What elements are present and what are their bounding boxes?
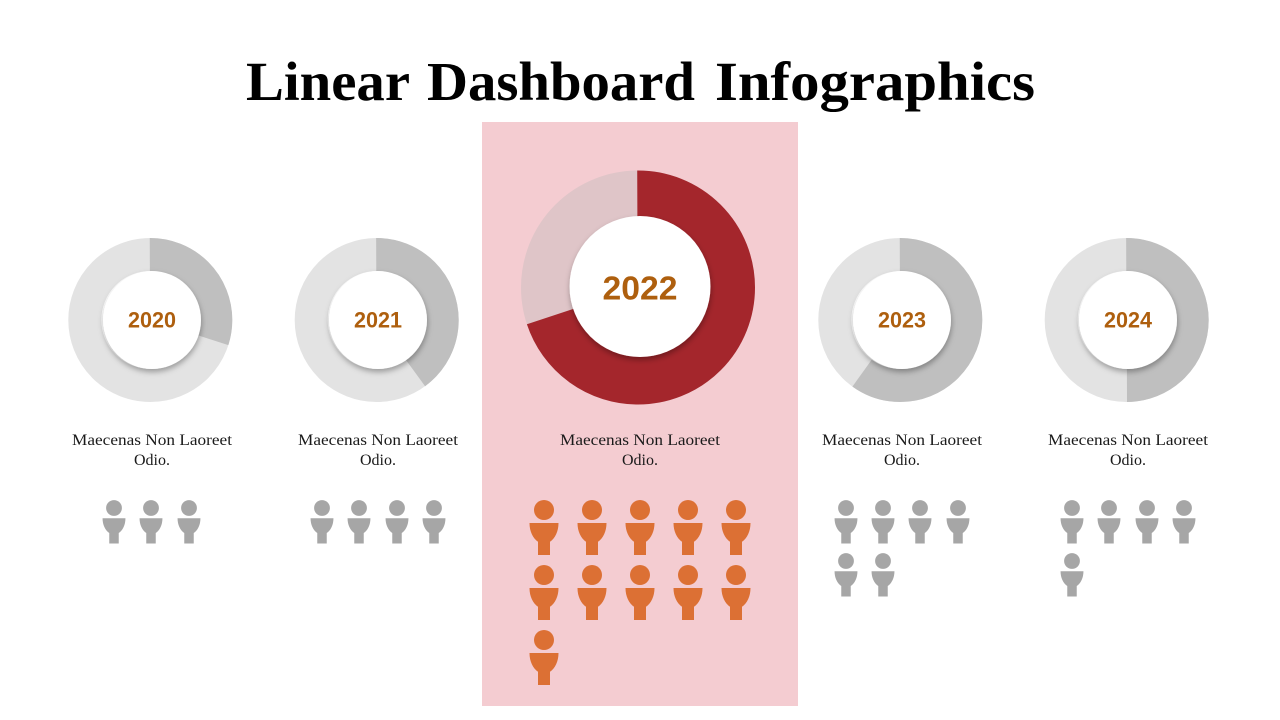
panel: highlighted 2022 background xyxy=(482,122,798,706)
title: Dashboard xyxy=(427,51,695,112)
people: 2023 xyxy=(835,500,969,597)
donut: 2020: 2020 xyxy=(128,307,176,332)
caption: 2024: Odio. xyxy=(1110,452,1146,469)
caption: 2020: Odio. xyxy=(134,452,170,469)
caption: 2022: Maecenas Non Laoreet xyxy=(560,432,721,449)
people: 2024 xyxy=(1061,500,1195,597)
column: 2020 xyxy=(72,254,233,544)
donut: 2023 xyxy=(835,254,966,386)
people: 2020 xyxy=(103,500,200,544)
caption: 2023: Odio. xyxy=(884,452,920,469)
caption: 2021: Odio. xyxy=(360,452,396,469)
donut: 2024 xyxy=(1061,254,1192,386)
donut: 2022: 2022 xyxy=(603,269,677,307)
caption: 2022: Odio. xyxy=(622,452,658,469)
title: Linear xyxy=(246,51,410,112)
donut: 2022 xyxy=(546,195,730,380)
donut: 2020 xyxy=(85,254,216,386)
caption: 2023: Maecenas Non Laoreet xyxy=(822,432,983,449)
donut: 2021: 2021 xyxy=(354,307,402,332)
column: 2022 highlighted xyxy=(530,195,751,685)
column: 2023 xyxy=(822,254,983,597)
people: 2022 xyxy=(530,500,751,685)
caption: 2024: Maecenas Non Laoreet xyxy=(1048,432,1209,449)
title: Infographics xyxy=(715,51,1035,112)
donut: 2023: 2023 xyxy=(878,307,926,332)
donut: 2021 xyxy=(311,254,442,386)
caption: 2020: Maecenas Non Laoreet xyxy=(72,432,233,449)
donut: 2024: 2024 xyxy=(1104,307,1153,332)
people: 2021 xyxy=(311,500,445,544)
caption: 2021: Maecenas Non Laoreet xyxy=(298,432,459,449)
column: 2021 xyxy=(298,254,459,544)
column: 2024 xyxy=(1048,254,1209,597)
